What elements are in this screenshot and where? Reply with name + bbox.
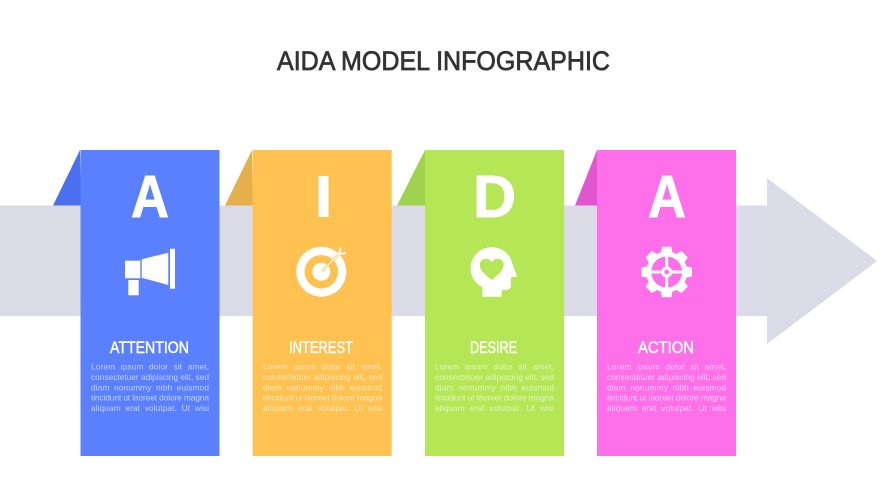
heading: desire: DESIRE bbox=[470, 339, 517, 357]
text block: action: consectetuer adipiscing elit, sed bbox=[607, 372, 726, 382]
letter I bbox=[318, 176, 328, 217]
card: desire bbox=[425, 150, 564, 456]
background arrow bbox=[0, 178, 877, 344]
text block: attention: Lorem ipsum dolor sit amet, bbox=[91, 362, 209, 372]
text block: desire bbox=[435, 362, 554, 413]
text block: interest: aliquam erat volutpat. Ut wisi bbox=[263, 403, 382, 413]
text block: action: diam nonummy nibh euismod bbox=[607, 382, 726, 392]
icon: gear bbox=[642, 247, 691, 297]
text block: interest: Lorem ipsum dolor sit amet, bbox=[263, 362, 382, 372]
card: attention bbox=[80, 150, 220, 456]
heading: interest: INTEREST bbox=[289, 339, 353, 357]
panel: interest bbox=[225, 150, 392, 456]
panel: attention bbox=[53, 150, 220, 456]
text block: interest bbox=[263, 362, 382, 413]
card fold: action bbox=[575, 150, 598, 206]
text block: desire: aliquam erat volutpat. Ut wisi bbox=[435, 403, 554, 413]
text block: interest: tincidunt ut laoreet dolore magna bbox=[263, 393, 382, 403]
title: AIDA MODEL INFOGRAPHIC bbox=[277, 46, 610, 76]
text block: attention: consectetuer adipiscing elit, sed bbox=[91, 372, 209, 382]
text block: attention: aliquam erat volutpat. Ut wisi bbox=[91, 403, 209, 413]
text block: desire: Lorem ipsum dolor sit amet, bbox=[435, 362, 554, 372]
icon: target bbox=[296, 247, 346, 297]
text block: desire: diam nonummy nibh euismod bbox=[435, 382, 554, 392]
card: action bbox=[597, 150, 736, 456]
card fold: attention bbox=[53, 150, 81, 206]
text block: attention bbox=[91, 362, 209, 413]
panel: desire bbox=[397, 150, 564, 456]
card: interest bbox=[253, 150, 392, 456]
icon: head with heart bbox=[471, 247, 517, 297]
text block: action: Lorem ipsum dolor sit amet, bbox=[607, 362, 726, 372]
text block: attention: tincidunt ut laoreet dolore magna bbox=[91, 393, 209, 403]
panel: action bbox=[575, 150, 736, 456]
text block: action: tincidunt ut laoreet dolore magna bbox=[607, 393, 726, 403]
heading: action: ACTION bbox=[638, 339, 694, 357]
card fold: desire bbox=[397, 150, 426, 206]
icon: megaphone bbox=[125, 249, 175, 295]
text block: interest: diam nonummy nibh euismod bbox=[263, 382, 382, 392]
text block: desire: tincidunt ut laoreet dolore magna bbox=[435, 393, 554, 403]
heading: attention: ATTENTION bbox=[110, 339, 189, 357]
text block: attention: diam nonummy nibh euismod bbox=[91, 382, 209, 392]
card fold: interest bbox=[225, 150, 253, 206]
text block: action bbox=[607, 362, 726, 413]
letter A: A bbox=[648, 164, 686, 230]
text block: action: aliquam erat volutpat. Ut wisi bbox=[607, 403, 726, 413]
text block: interest: consectetuer adipiscing elit, sed bbox=[263, 372, 382, 382]
letter D: D bbox=[473, 164, 516, 230]
letter A: A bbox=[131, 164, 169, 230]
text block: desire: consectetuer adipiscing elit, sed bbox=[435, 372, 554, 382]
